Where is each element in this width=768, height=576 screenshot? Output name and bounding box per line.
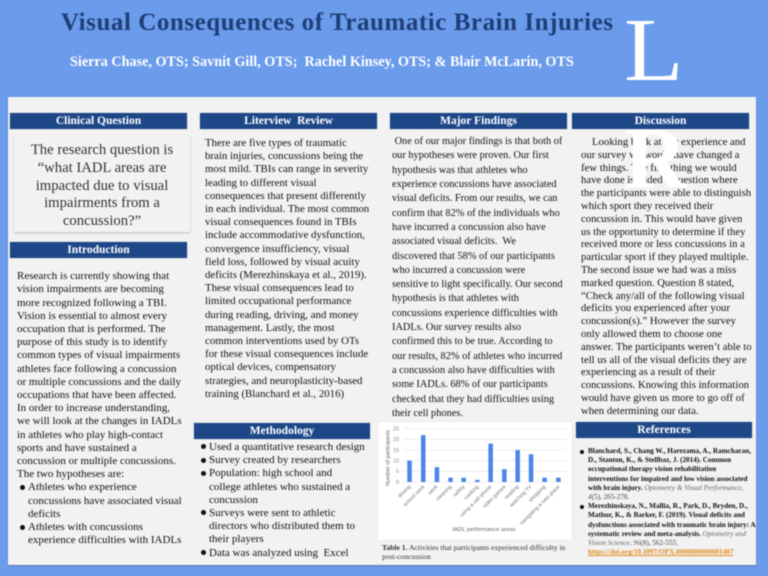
list: references: interventions for impaired and low vision associated <box>588 475 747 483</box>
list: methods <box>200 441 365 560</box>
text: discussion body: deficits you experienced after your <box>581 302 730 314</box>
list: references: systematic review and meta-analysis. Optometry and <box>588 530 746 538</box>
text: introduction body: we will look at the changes in IADLs <box>17 415 182 427</box>
text: introduction body: in athletes who play high-contact <box>17 429 163 441</box>
text: introduction body: The two hypotheses are: <box>17 468 124 480</box>
text: findings body: a concussion also have difficulties with <box>392 365 555 376</box>
logo letter R overlapping discussion text: R <box>624 109 687 206</box>
text: discussion body: Looking back at our experience and <box>592 136 745 148</box>
bar chart: IADL performance areas: work <box>427 484 440 496</box>
text: introduction body: Research is currently showing that <box>17 270 169 282</box>
list: methods: Data was analyzed using Excel <box>209 547 349 559</box>
bar chart: IADL performance areas: 20 <box>393 437 399 443</box>
list: references <box>579 447 756 557</box>
bar chart: IADL performance areas: 10 <box>393 459 399 465</box>
text: introduction body: occupations that have been affected. <box>17 389 177 401</box>
text: discussion body: The second issue we had was a miss <box>581 264 736 276</box>
card: research question: The research question is <box>31 142 173 158</box>
bar chart: IADL performance areas: school work <box>402 484 427 508</box>
text: literature review body: strategies, and neuroplasticity-based <box>205 375 362 387</box>
text: findings body: some IADLs. 68% of our participants <box>392 379 548 390</box>
list: references: with brain injury. Optometry & Visual Performance, <box>588 484 743 492</box>
text: literature review body: field loss, followed by visual acuity <box>205 256 360 268</box>
card: research question: “what IADL areas are <box>38 160 166 176</box>
text: findings body: our results, 82% of athletes who incurred <box>392 351 562 362</box>
bar chart: IADL performance areas: cooking <box>463 484 480 501</box>
text: literature review body: training (Blanchard et al., 2016) <box>205 388 344 400</box>
list: hypotheses: deficits <box>28 508 60 520</box>
card: research question <box>14 135 190 232</box>
list: references: Merezhinskaya, N., Mallia, R., Park, D., Bryden, D., <box>588 502 748 510</box>
list: methods: directors who distributed them to <box>209 520 355 532</box>
text: literature review body: limited occupational performance <box>205 295 351 307</box>
text: discussion body: which sport they received their <box>581 200 713 212</box>
bar chart: IADL performance areas: using a cell phone <box>459 484 493 519</box>
list: methods: Used a quantitative research design <box>209 441 365 453</box>
text: discussion body: particular sport if they played multiple. <box>581 251 748 263</box>
text: findings body: associated visual deficits. We <box>392 236 516 247</box>
text: literature review body: leading to different visual <box>205 176 317 188</box>
bar chart: IADL performance areas: IADL performance areas <box>453 527 516 533</box>
heading: major findings <box>390 113 567 129</box>
list: methods: Population: high school and <box>209 467 332 479</box>
text: introduction body: concussion or multiple concussions. <box>17 455 176 467</box>
text: literature review body: common interventions used by OTs <box>205 335 359 347</box>
list: references: 4(5), 265-278. <box>588 493 629 501</box>
list: references: Vision Science, 96(8), 562-555. <box>588 539 678 547</box>
text: introduction body: occupation that is performed. The <box>17 323 166 335</box>
list: hypotheses: concussions have associated visual <box>28 495 182 507</box>
text: findings body: One of our major findings is that both of <box>395 136 562 147</box>
list: methods: college athletes who sustained a <box>209 480 350 492</box>
text: literature review body: visual consequences found in TBIs <box>205 216 357 228</box>
text: discussion body: our survey we would have changed a <box>581 149 739 161</box>
text: discussion body: answer. The participants weren’t able to <box>581 341 752 353</box>
text: introduction body: or multiple concussions and the daily <box>17 376 181 388</box>
text: discussion body: only allowed them to choose one <box>581 328 722 340</box>
text: discussion body: concussion in. This would have given <box>581 213 742 225</box>
text: literature review body: during reading, driving, and money <box>205 309 359 321</box>
bar chart: IADL performance areas: safety <box>452 484 467 498</box>
text: literature review body: optical devices, compensatory <box>205 361 336 373</box>
text: findings body: confirmed this to be true. According to <box>392 336 553 347</box>
list: hypotheses: experience difficulties with IADLs <box>28 534 181 546</box>
heading: discussion <box>572 113 749 129</box>
heading: references: References <box>637 424 691 436</box>
bar chart: IADL performance areas: driving <box>397 484 412 499</box>
text: introduction body: common types of visual impairments <box>17 349 180 361</box>
text: discussion body: received more or less concussions in a <box>581 238 745 250</box>
text: literature review body: There are five types of traumatic <box>205 137 347 149</box>
text: introduction body <box>16 270 182 480</box>
text: discussion body: have done is added a question where <box>581 174 738 186</box>
text: discussion body: experiencing as a result of their <box>581 366 715 378</box>
bar chart: IADL performance areas: video games <box>482 484 508 510</box>
text: literature review body <box>204 137 370 400</box>
text: findings body: confirm that 82% of the individuals who <box>392 208 560 219</box>
text: discussion body: us the opportunity to determine if they <box>581 226 745 238</box>
text: literature review body: consequences that present differently <box>205 190 366 202</box>
list: hypotheses: Athletes with concussions <box>28 521 143 533</box>
heading: literature review <box>200 113 377 129</box>
heading: major findings: Major Findings <box>440 115 517 127</box>
text: findings body: hypothesis was that athletes who <box>392 165 528 176</box>
text: findings body: experience concussions have associated <box>392 179 557 190</box>
text: introduction body: athletes face following a concussion <box>17 363 176 375</box>
table caption: post-concussion <box>382 552 431 560</box>
bar chart: IADL performance areas: 0 <box>396 480 399 486</box>
bar chart: IADL performance areas: 25 <box>393 427 399 433</box>
list: methods: their players <box>209 533 264 545</box>
list: references: occupational therapy vision rehabilitation <box>588 465 716 473</box>
card: research question: impacted due to visual <box>36 178 168 194</box>
panel: discussion <box>571 112 752 418</box>
text: literature review body: brain injuries, concussions being the <box>205 150 363 162</box>
heading: methodology <box>194 423 370 439</box>
text: findings body: hypothesis is that athletes with <box>392 293 519 304</box>
bar chart: IADL performance areas: reading <box>504 484 520 501</box>
list: references: https://doi.org/10.1097/OPX.0000000000001407 <box>588 548 734 556</box>
panel: introduction <box>9 241 188 546</box>
text: discussion body: tell us all of the visual deficits they are <box>581 354 747 366</box>
logo letter L: L <box>624 1 683 100</box>
list: references: Blanchard, S., Chang W., Harezama, A., Ramcharan, <box>588 447 751 455</box>
panel: major findings <box>389 112 568 420</box>
text: findings body: who incurred a concussion were <box>392 265 525 276</box>
title: Visual Consequences of Traumatic Brain Injuries <box>61 9 614 36</box>
text: discussion body: would have given us more to go off of <box>581 392 745 404</box>
text: literature review body: include accommodative dysfunction, <box>205 229 365 241</box>
text: discussion body: concussion(s).” However the survey <box>581 315 736 327</box>
text: literature review body: convergence insufficiency, visual <box>205 243 349 255</box>
text: introduction body: Vision is essential to almost every <box>17 310 167 322</box>
text: discussion body: when determining our data. <box>581 405 699 417</box>
text: findings body: their cell phones. <box>392 408 463 419</box>
table caption: Table 1. Activities that participants experienced difficulty in <box>382 542 565 552</box>
heading: introduction <box>10 242 187 258</box>
list: hypotheses: Athletes who experience <box>28 481 137 493</box>
text: introduction body: more recognized following a TBI. <box>17 297 167 309</box>
text: introduction body: sports and have sustained a <box>17 442 137 454</box>
list: methods: concussion <box>209 494 258 506</box>
bar chart: IADL performance areas: Number of participants <box>386 430 392 486</box>
heading: clinical question <box>10 113 187 129</box>
text: introduction body: In order to increase understanding, <box>17 402 170 414</box>
text: discussion body: “Check any/all of the following visual <box>581 290 745 302</box>
text: discussion body <box>580 136 752 418</box>
list: references: D., Stanton, K., & Stellbaz, J. (2014). Common <box>588 456 731 464</box>
heading: methodology: Methodology <box>250 425 314 437</box>
text: discussion body: concussions. Knowing this information <box>581 379 749 391</box>
bar chart: IADL performance areas: watching TV <box>509 484 534 509</box>
bar chart: IADL performance areas: shopping <box>528 484 547 504</box>
text: introduction body: vision impairments are becoming <box>17 283 164 295</box>
text: findings body: concussions experience difficulties with <box>392 308 558 319</box>
poster panel background <box>8 97 756 565</box>
bar chart: IADL performance areas: navigating a new place <box>519 484 561 527</box>
text: findings body: checked that they had difficulties using <box>392 394 554 405</box>
text: findings body: discovered that 58% of our participants <box>392 251 555 262</box>
text: findings body: our hypotheses were proven. Our first <box>392 150 549 161</box>
text: discussion body: marked question. Question 8 stated, <box>581 277 734 289</box>
text: findings body: sensitive to light specifically. Our second <box>392 279 563 290</box>
list: references: dysfunctions associated with traumatic brain injury: A <box>588 521 756 529</box>
heading: references <box>576 422 752 438</box>
heading: introduction: Introduction <box>67 244 130 256</box>
bar chart: IADL performance areas: 5 <box>396 469 399 475</box>
card: research question: impairments from a <box>44 195 160 211</box>
text: literature review body: for these visual consequences include <box>205 348 368 360</box>
list: references: Mathur, K., & Barker, F. (2019). Visual deficits and <box>588 511 745 519</box>
text: findings body: IADLs. Our survey results also <box>392 322 521 333</box>
text: findings body: have incurred a concussion also have <box>392 222 546 233</box>
text: literature review body: in each individual. The most common <box>205 203 369 215</box>
list: methods: Survey created by researchers <box>209 454 341 466</box>
text: literature review body: most mild. TBIs can range in severity <box>205 163 368 175</box>
bar chart: IADL performance areas: 15 <box>393 448 399 454</box>
list: methods: Surveys were sent to athletic <box>209 507 335 519</box>
text: literature review body: management. Lastly, the most <box>205 322 335 334</box>
panel: methodology <box>193 422 371 560</box>
bar chart: IADL performance areas <box>378 422 572 540</box>
authors: Sierra Chase, OTS; Savnit Gill, OTS; Rachel Kinsey, OTS; & Blair McLarin, OTS <box>70 54 574 70</box>
heading: discussion: Discussion <box>635 115 686 127</box>
table caption <box>381 542 566 562</box>
text: findings body <box>392 136 563 420</box>
panel: clinical question <box>9 112 191 234</box>
text: introduction body: purpose of this study is to identify <box>17 336 167 348</box>
text: findings body: visual deficits. From our results, we can <box>392 193 557 204</box>
panel: references <box>575 421 756 557</box>
text: discussion body: the participants were able to distinguish <box>581 187 751 199</box>
card: research question: concussion?” <box>63 213 141 229</box>
text: discussion body: few things. The first thing we would <box>581 162 737 174</box>
panel: literature review <box>199 112 378 400</box>
text: literature review body: deficits (Merezhinskaya et al., 2019). <box>205 269 367 281</box>
text: literature review body: These visual consequences lead to <box>205 282 354 294</box>
heading: literature review: Literview Review <box>244 115 333 127</box>
list: hypotheses <box>19 481 182 546</box>
heading: clinical question: Clinical Question <box>56 115 141 127</box>
bar chart: IADL performance areas: cleaning <box>435 484 453 502</box>
